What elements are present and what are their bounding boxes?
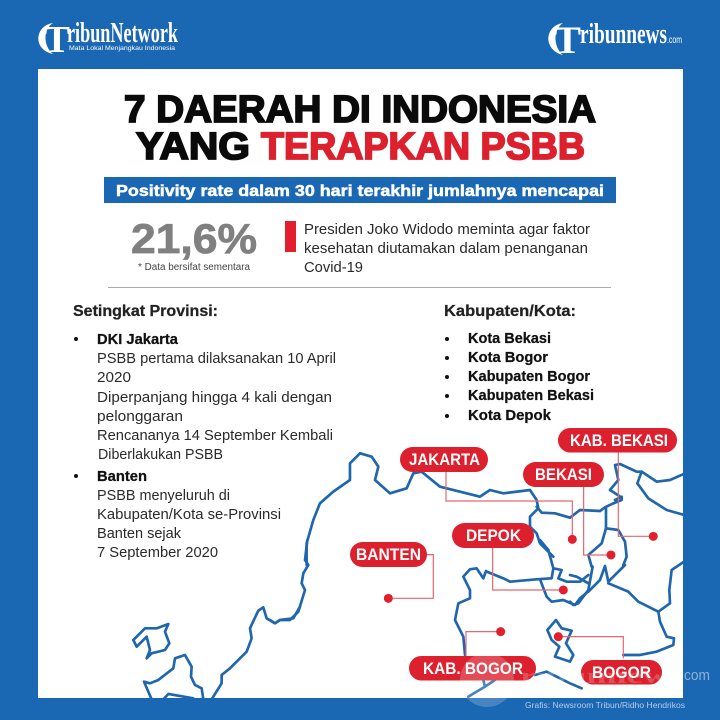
logo: Tribun Network: ribunNetwork	[67, 17, 179, 49]
title	[124, 89, 596, 168]
watermark: .com: com	[684, 667, 710, 684]
text block: Setingkat Provinsi: Rencananya 14 September Kembali	[97, 428, 333, 444]
callout: red marker and statement: Covid-19	[304, 260, 363, 276]
label: Kab. Bekasi: KAB. BEKASI	[570, 431, 668, 450]
text block: Setingkat Provinsi: Diperpanjang hingga 4 kali dengan	[97, 390, 332, 406]
logo: Tribunnews.com: ribunnews	[580, 18, 667, 50]
callout: red marker and statement: Presiden Joko Widodo meminta agar faktor	[304, 222, 590, 238]
callout: red marker and statement	[285, 221, 590, 276]
text block: Setingkat Provinsi: Kabupaten/Kota se-Provinsi	[97, 507, 281, 523]
text block: Setingkat Provinsi	[73, 303, 336, 561]
stat: 21,6%: * Data bersifat sementara	[138, 262, 250, 273]
logo: Tribun Network: T	[44, 19, 70, 61]
label: Jakarta	[400, 447, 488, 472]
label: Kab. Bogor	[409, 656, 536, 680]
text block: Kabupaten/Kota: Kota Bekasi	[468, 331, 551, 347]
logo: Tribunnews.com: T	[554, 19, 581, 62]
text block: Setingkat Provinsi: 2020	[97, 370, 131, 386]
text block: Setingkat Provinsi: pelonggaran	[97, 409, 183, 425]
text block: Setingkat Provinsi: Banten	[97, 469, 147, 485]
label: Kab. Bogor: KAB. BOGOR	[423, 659, 523, 678]
text block: Setingkat Provinsi: PSBB pertama dilaksanakan 10 April	[97, 351, 336, 367]
title: 7 DAERAH DI INDONESIA	[124, 89, 596, 131]
text block: Kabupaten/Kota: Kabupaten/Kota:	[444, 303, 576, 320]
label: Bogor: BOGOR	[592, 663, 651, 682]
text block: Kabupaten/Kota: Kabupaten Bogor	[468, 369, 590, 385]
logo: Tribunnews.com	[548, 18, 682, 62]
credit: Grafis: Newsroom Tribun/Ridho Hendrikos	[525, 701, 685, 710]
label: Depok	[452, 523, 534, 548]
text block: Setingkat Provinsi: Banten sejak	[97, 526, 182, 542]
text block: Kabupaten/Kota	[444, 303, 594, 424]
label: Bekasi	[523, 462, 604, 487]
stat: 21,6%: 21,6%	[131, 215, 257, 262]
watermark	[460, 653, 684, 707]
leader lines and location dots	[384, 452, 658, 658]
logo: Tribunnews.com: .com	[667, 35, 682, 46]
title: TERAPKAN PSBB	[261, 126, 585, 168]
label: Banten: BANTEN	[356, 545, 421, 564]
watermark: ribunnews	[520, 663, 684, 688]
text block: Setingkat Provinsi: 7 September 2020	[97, 545, 218, 561]
label: Depok: DEPOK	[466, 526, 522, 545]
title: YANG	[136, 126, 250, 168]
text block: Setingkat Provinsi: PSBB menyeluruh di	[97, 488, 230, 504]
map: regional boundaries	[133, 453, 687, 699]
label: Kab. Bekasi	[558, 428, 677, 452]
panel: white content area	[38, 69, 683, 698]
text block: Kabupaten/Kota: Kabupaten Bekasi	[468, 388, 594, 404]
label: Bekasi: BEKASI	[535, 465, 592, 484]
label: Jakarta: JAKARTA	[409, 450, 480, 469]
banner: positivity rate	[104, 177, 616, 203]
logo: Tribun Network: Mata Lokal Menjangkau Indonesia	[69, 46, 176, 52]
logo: Tribun Network	[38, 17, 179, 61]
text block: Kabupaten/Kota: Kota Bogor	[468, 350, 548, 366]
label: Banten	[350, 542, 427, 567]
text block: Kabupaten/Kota: Kota Depok	[468, 408, 552, 424]
label: Bogor	[581, 660, 662, 684]
text block: Setingkat Provinsi: DKI Jakarta	[97, 332, 179, 348]
callout: red marker and statement: kesehatan diutamakan dalam penanganan	[304, 241, 588, 257]
text block: Setingkat Provinsi: Setingkat Provinsi:	[73, 303, 218, 320]
text block: Setingkat Provinsi: Diberlakukan PSBB	[98, 447, 223, 463]
banner: positivity rate: Positivity rate dalam 30 hari terakhir jumlahnya mencapai	[116, 183, 604, 200]
